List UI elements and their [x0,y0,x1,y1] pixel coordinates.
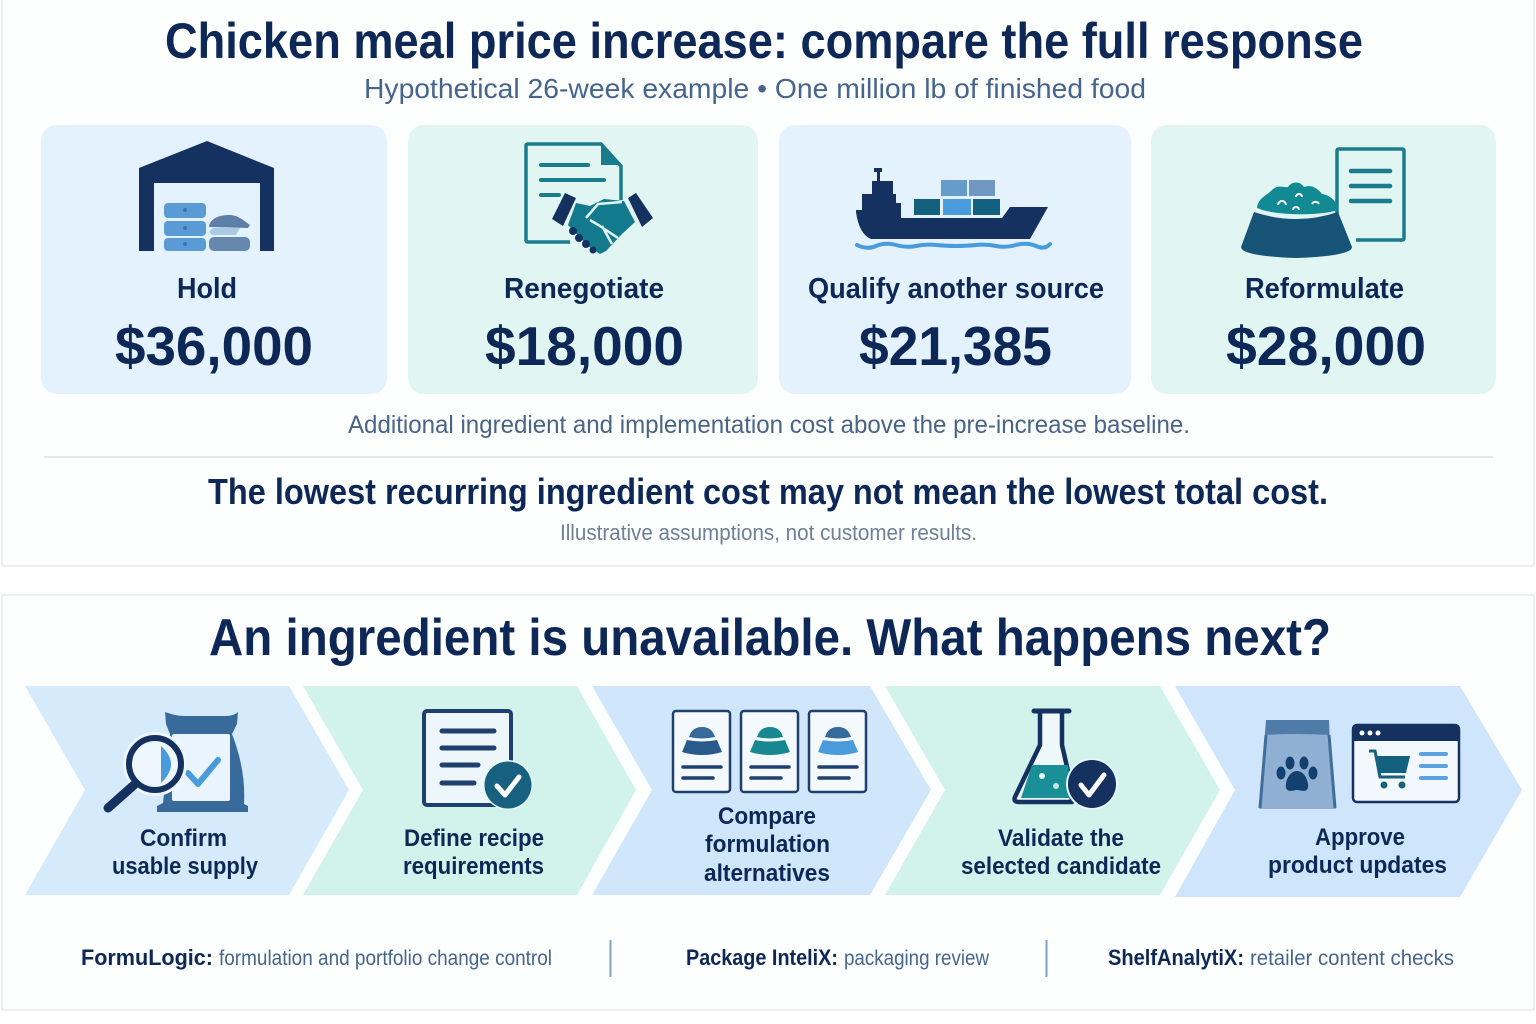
label: reformulate: Reformulate [1245,273,1404,305]
tool note: ShelfAnalytiX: retailer content checks [1250,947,1454,970]
label: requirements [403,853,544,880]
step 4: validate the selected candidate [885,686,1220,895]
label: renegotiate: Renegotiate [504,273,664,305]
icon: cargo ship [856,168,1050,248]
step 3: compare formulation alternatives [592,686,931,895]
icon: contract and handshake [526,144,653,254]
tool note: ShelfAnalytiX [1108,945,1454,970]
step 5: approve product updates [1175,686,1522,897]
icon: three formula cards [673,711,866,792]
label: Define recipe [404,825,544,852]
value: qualify another source: $21,385 [859,315,1052,377]
label: Validate the [998,825,1124,852]
label: Approve [1315,824,1405,851]
value: renegotiate: $18,000 [485,315,684,377]
tool note: Package InteliX: Package InteliX: [686,945,838,970]
panel: ingredient unavailable process [2,595,1534,1010]
card: qualify another source [779,125,1131,394]
label: Compare [718,803,816,830]
icon: warehouse [139,141,274,251]
tool note: Package InteliX [686,945,990,970]
label: alternatives [704,860,830,887]
icon: flask with check [1014,711,1118,810]
label: qualify another source: Qualify another source [808,273,1104,305]
panel: price increase comparison [2,0,1534,566]
key takeaway: The lowest recurring ingredient cost may not mean the lowest total cost. [208,471,1328,512]
subtitle: Hypothetical 26-week example • One million lb of finished food [364,73,1146,104]
label: Confirm [140,825,227,852]
tool note: FormuLogic: formulation and portfolio change control [219,947,552,970]
label: hold: Hold [177,273,237,305]
title: Chicken meal price increase: compare the full response [165,13,1363,69]
icon: pet food bag and web store [1259,720,1459,809]
card: reformulate [1151,125,1496,394]
icon: bag and magnifier [108,712,248,812]
value: hold: $36,000 [115,315,313,377]
label: product updates [1268,852,1447,879]
caption: cost definition: Additional ingredient and implementation cost above the pre-increase baseline. [348,411,1190,439]
step 1: confirm usable supply [25,686,349,895]
label: selected candidate [961,853,1161,880]
tool note: Package InteliX: packaging review [844,947,990,970]
label: formulation [705,831,830,858]
icon: food bowl and recipe sheet [1241,149,1404,258]
icon: document with check [424,711,533,810]
heading: An ingredient is unavailable. What happens next? [209,609,1331,667]
tool note: ShelfAnalytiX: ShelfAnalytiX: [1108,945,1244,970]
card: hold [41,125,387,394]
tool note: FormuLogic: FormuLogic: [81,945,213,970]
label: usable supply [112,853,259,880]
card: renegotiate [408,125,758,394]
value: reformulate: $28,000 [1226,315,1426,377]
step 2: define recipe requirements [303,686,636,895]
tool note: FormuLogic [81,945,552,970]
disclaimer: Illustrative assumptions, not customer results. [560,520,977,545]
